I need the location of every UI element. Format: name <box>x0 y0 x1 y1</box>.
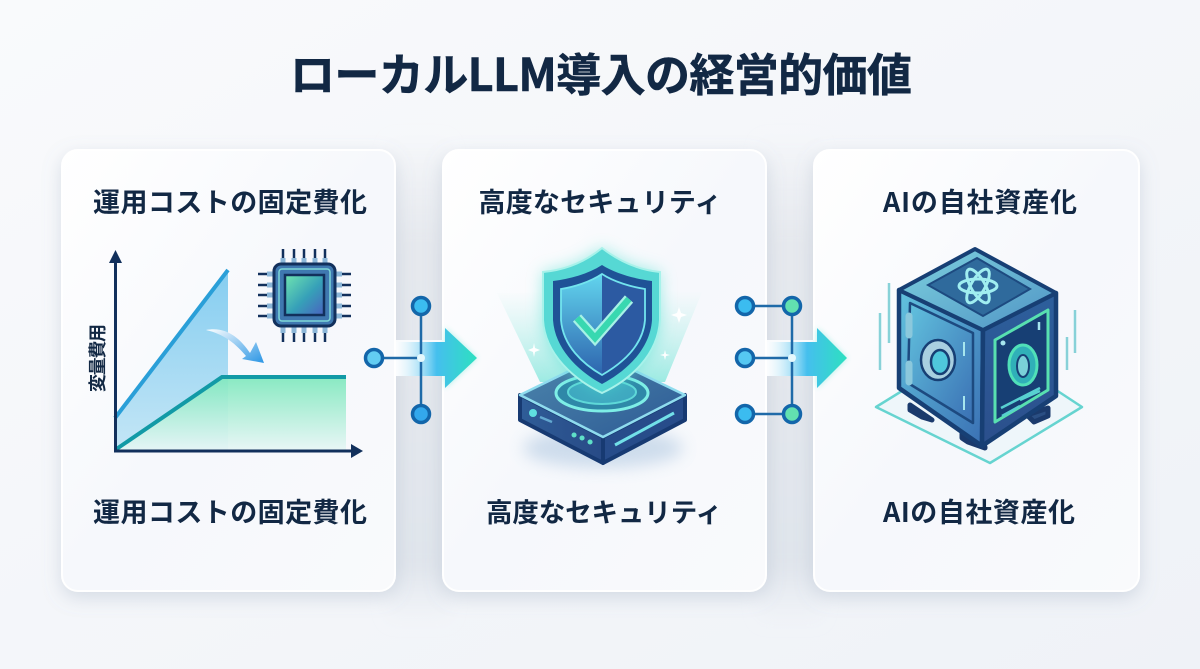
arrow: connector 1 <box>366 298 477 422</box>
safe feet <box>910 405 1048 448</box>
y axis arrowhead <box>109 250 122 263</box>
dial centre <box>931 350 949 374</box>
hinges <box>906 316 912 382</box>
y axis label: 変量費用 <box>84 324 110 392</box>
safe dial <box>921 340 955 380</box>
heading: asset top: AIの自社資産化 <box>882 181 1077 220</box>
right access panel <box>995 310 1048 422</box>
green cost line <box>115 377 346 450</box>
heading: fixed cost bottom: 運用コストの固定費化 <box>93 491 367 530</box>
chip die <box>285 275 324 315</box>
safe door <box>908 303 973 423</box>
blue cost line <box>115 270 228 418</box>
platform <box>876 386 1082 463</box>
server dash <box>540 417 552 422</box>
door marks <box>963 342 965 410</box>
heading: fixed cost top: 運用コストの固定費化 <box>93 181 367 220</box>
safe top <box>899 249 1056 330</box>
safe left face <box>899 290 983 446</box>
chip body <box>274 264 335 326</box>
panel: AI as company asset <box>814 150 1139 591</box>
panel screw <box>1000 340 1006 346</box>
gutter band left <box>388 135 450 625</box>
top panel <box>928 258 1030 316</box>
arrow: connector 2 <box>736 298 847 422</box>
arrow body <box>396 328 477 388</box>
green area <box>115 377 346 451</box>
panel lines <box>1001 388 1040 416</box>
shield inner frame <box>553 265 652 384</box>
shield face left <box>561 274 602 375</box>
x axis arrowhead <box>351 444 363 458</box>
server left side <box>520 395 603 463</box>
glow ring outer <box>556 375 648 411</box>
server dots <box>574 435 590 442</box>
panel marks <box>1038 322 1040 330</box>
glow ring inner <box>568 380 636 404</box>
gutter band right <box>759 135 821 625</box>
icon: server <box>520 355 685 468</box>
check mark <box>577 299 629 338</box>
server status light <box>529 409 537 417</box>
curved arrow <box>206 329 264 363</box>
hub <box>788 354 796 362</box>
chip edge highlight <box>279 269 330 321</box>
motion lines <box>880 283 1075 370</box>
light beam <box>497 290 703 382</box>
server light strip <box>615 413 674 445</box>
circuit nodes <box>366 298 430 422</box>
server right side <box>603 395 685 463</box>
heading: asset bottom: AIの自社資産化 <box>882 491 1075 530</box>
fingerprint core <box>1017 355 1029 377</box>
icon: safe <box>899 249 1056 448</box>
sparkles <box>528 307 687 360</box>
heading: security bottom: 高度なセキュリティ <box>486 491 722 530</box>
check mark outline <box>577 299 629 338</box>
x axis <box>114 450 355 452</box>
arrow body <box>767 328 847 388</box>
circuit lines <box>374 306 421 414</box>
safe right face <box>982 293 1056 446</box>
shield inner outline <box>561 274 645 375</box>
panel: advanced security <box>443 150 766 591</box>
circuit nodes <box>736 298 800 422</box>
shield face right <box>602 274 645 375</box>
fingerprint ring <box>1009 345 1037 385</box>
circuit lines <box>745 306 792 414</box>
chip pads <box>267 258 342 333</box>
y axis <box>114 258 117 452</box>
title: ローカルLLM導入の経営的価値 <box>290 39 912 104</box>
chart: variable vs fixed cost <box>84 250 363 458</box>
shield outer <box>543 248 660 393</box>
panel: fixed running cost <box>62 150 395 591</box>
server top <box>520 355 685 437</box>
heading: security top: 高度なセキュリティ <box>478 181 722 220</box>
icon: shield <box>528 248 687 393</box>
swirl logo <box>959 266 997 306</box>
blue area <box>115 270 228 451</box>
hub <box>417 354 425 362</box>
icon: chip <box>258 249 351 342</box>
